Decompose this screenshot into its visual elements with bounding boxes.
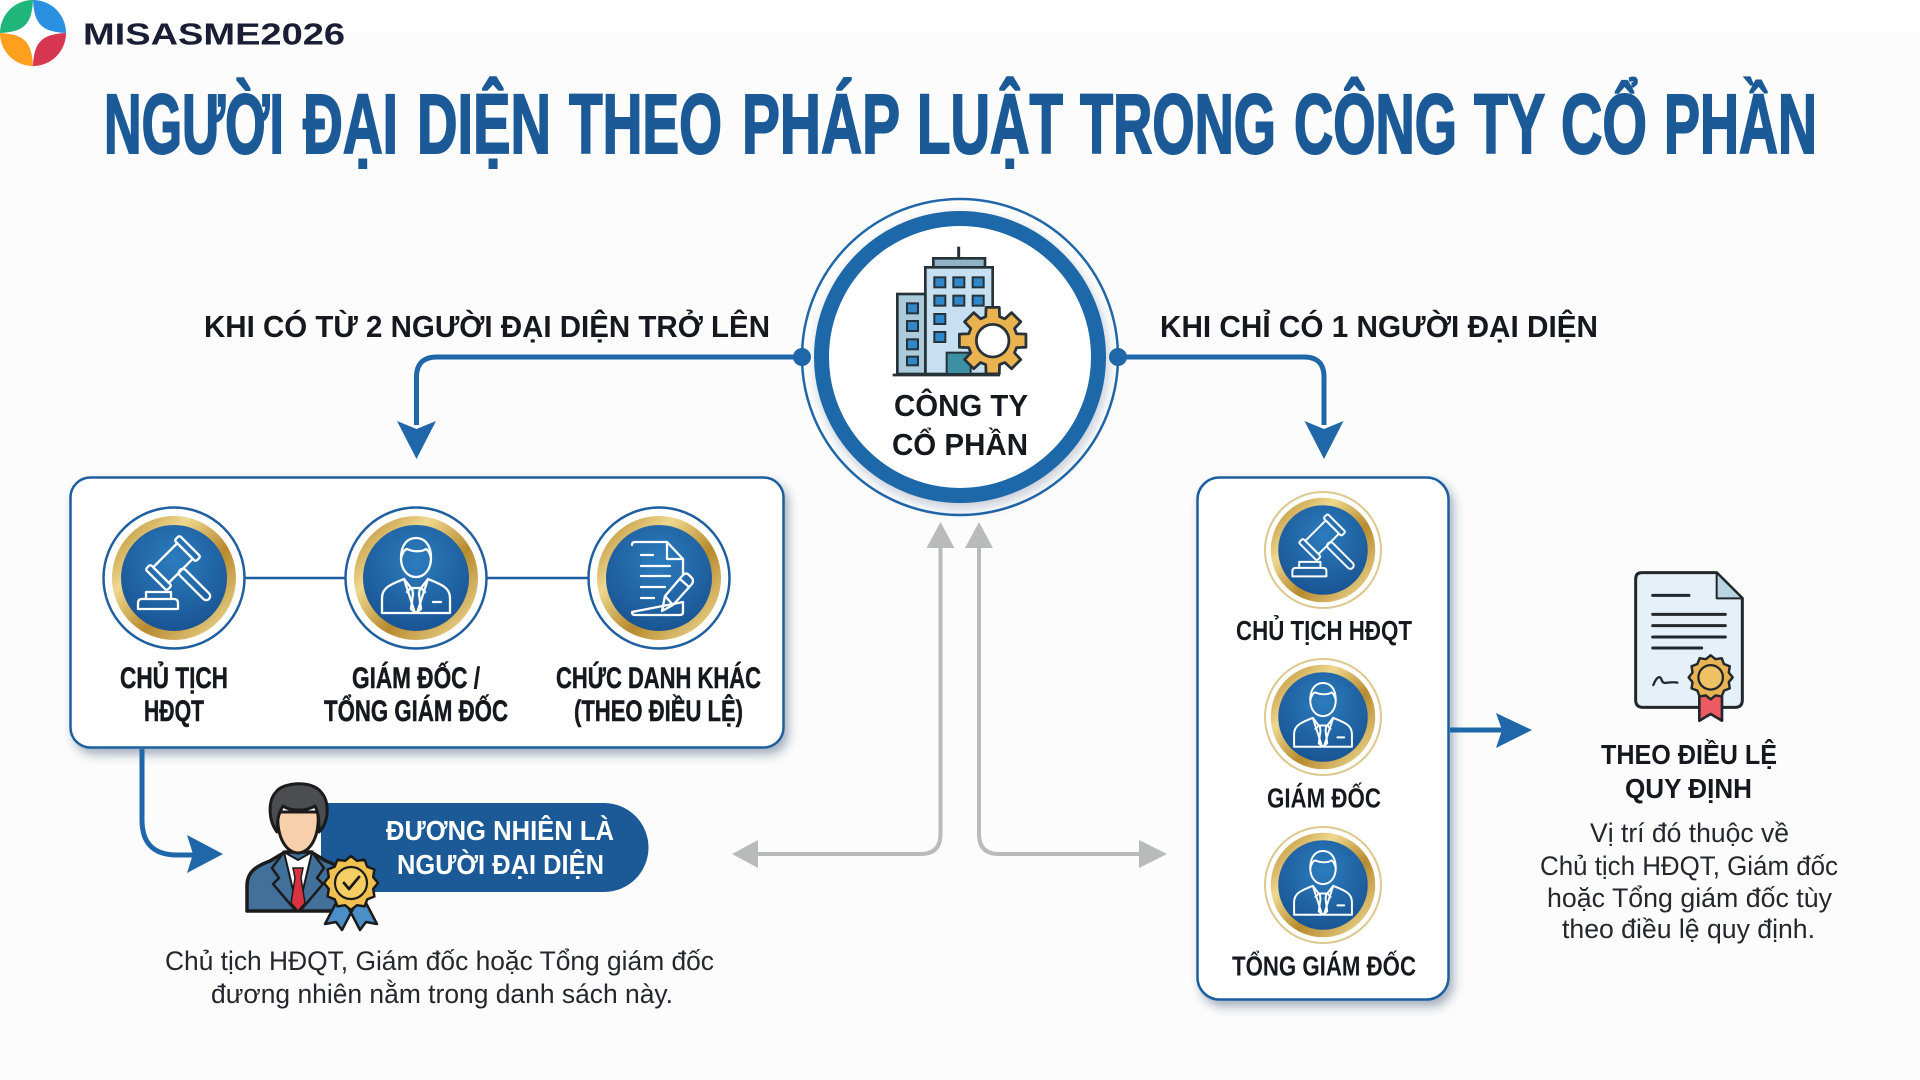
pill: automatic representative — [321, 803, 648, 892]
text: charter description — [1540, 818, 1838, 944]
label: director: GIÁM ĐỐC — [1267, 782, 1381, 814]
label: director: GIÁM ĐỐC / — [352, 661, 480, 695]
title: LUẬT — [917, 77, 1063, 171]
title: THEO — [569, 77, 722, 171]
heading: two or more representatives: KHI CÓ TỪ 2 NGƯỜI ĐẠI DIỆN TRỞ LÊN — [204, 308, 770, 344]
pill: automatic representative: ĐƯƠNG NHIÊN LÀ — [386, 815, 614, 846]
heading: one representative: KHI CHỈ CÓ 1 NGƯỜI ĐẠI DIỆN — [1160, 308, 1598, 344]
logo text: MISASME2026 — [83, 16, 345, 52]
title: DIỆN — [417, 77, 551, 171]
text: charter description: theo điều lệ quy định. — [1562, 914, 1815, 944]
heading: per charter: THEO ĐIỀU LỆ — [1601, 739, 1777, 770]
company label: CÔNG TY — [894, 387, 1028, 423]
icon: chairman gavel — [1265, 492, 1381, 608]
text: charter description: hoặc Tổng giám đốc tùy — [1547, 883, 1832, 913]
panel: single representative — [1198, 478, 1448, 1000]
title — [104, 77, 1817, 171]
title: PHÁP — [742, 77, 900, 171]
text: charter description: Vị trí đó thuộc về — [1590, 818, 1789, 848]
company label: CỔ PHẦN — [892, 426, 1028, 462]
label: director: TỔNG GIÁM ĐỐC — [324, 694, 508, 728]
heading: per charter — [1601, 739, 1777, 804]
arrow: left panel to automatic representative — [142, 749, 223, 873]
title: TRONG — [1080, 77, 1276, 171]
text: automatic representative note: đương nhiên nằm trong danh sách này. — [211, 978, 673, 1009]
logo — [0, 0, 345, 66]
arrow: company to left panel — [397, 357, 802, 459]
arrow: company to right panel — [1118, 357, 1344, 459]
company label — [892, 387, 1028, 462]
icon: other title document — [588, 508, 730, 648]
icon: director — [346, 508, 486, 648]
title: CÔNG — [1294, 77, 1457, 171]
label: chairman: CHỦ TỊCH HĐQT — [1236, 614, 1412, 646]
title: PHẦN — [1664, 77, 1817, 171]
label: director — [324, 661, 508, 728]
text: charter description: Chủ tịch HĐQT, Giám đốc — [1540, 851, 1838, 881]
arrow: right panel to charter — [1450, 713, 1532, 748]
title: CỔ — [1561, 77, 1647, 171]
arrow: gray to right group — [965, 522, 1167, 868]
text: automatic representative note: Chủ tịch HĐQT, Giám đốc hoặc Tổng giám đốc — [165, 946, 714, 976]
label: other title — [556, 661, 761, 728]
label: chairman: CHỦ TỊCH — [120, 661, 228, 695]
pill: automatic representative: NGƯỜI ĐẠI DIỆN — [397, 849, 604, 880]
icon: charter document with seal — [1636, 573, 1742, 721]
label: other title: (THEO ĐIỀU LỆ) — [574, 694, 743, 728]
title: NGƯỜI — [104, 77, 284, 171]
arrow: gray to left group — [732, 522, 954, 868]
label: other title: CHỨC DANH KHÁC — [556, 661, 761, 695]
text: automatic representative note — [165, 946, 714, 1009]
icon: medal badge — [324, 856, 378, 930]
icon: director — [1265, 659, 1381, 775]
label: chairman — [120, 661, 228, 728]
panel: multiple representatives — [70, 478, 784, 748]
icon: chairman gavel — [104, 508, 244, 648]
icon: building with gear — [893, 247, 1026, 375]
label: chairman: HĐQT — [144, 695, 204, 728]
label: general director: TỔNG GIÁM ĐỐC — [1232, 950, 1416, 982]
icon: general director — [1265, 827, 1381, 943]
icon: businessman with badge — [247, 784, 378, 930]
central company circle — [793, 199, 1127, 515]
title: TY — [1474, 77, 1545, 171]
title: ĐẠI — [303, 77, 398, 171]
heading: per charter: QUY ĐỊNH — [1625, 773, 1752, 804]
icon: logo mark — [0, 0, 66, 66]
